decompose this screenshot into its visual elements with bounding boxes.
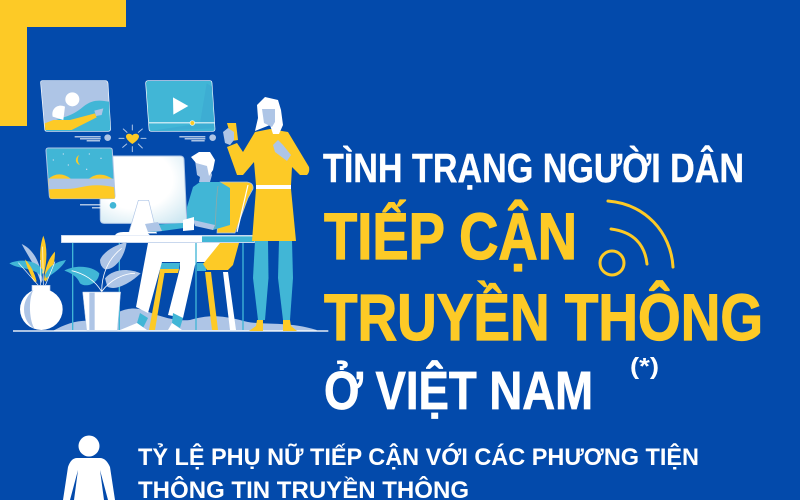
seated man [120,152,239,330]
section heading: TỶ LỆ PHỤ NỮ TIẾP CẬN VỚI CÁC PHƯƠNG TIỆN [138,442,699,471]
title line 2: TIẾP CẬN [324,199,577,273]
belt [256,185,291,189]
illustration: people at a desk with media [9,81,328,332]
video card with play button [146,81,215,131]
chair [149,182,253,330]
image card: person and landscape [41,81,111,131]
media cards and monitor [41,81,216,233]
corner bracket [0,0,126,126]
arms and hands [147,223,184,232]
sweater [227,129,309,185]
ground hills and line [13,308,328,332]
skirt [252,189,296,241]
hair [255,97,283,134]
trousers [136,243,222,318]
torso [187,182,230,230]
phone and hands [227,123,238,141]
plant in round vase [9,236,66,330]
night landscape card [46,148,115,199]
socks and shoes [137,313,183,328]
monitor [80,156,187,233]
section heading [138,442,699,500]
head [195,160,212,182]
plants [9,236,141,330]
face [262,109,275,127]
legs [253,241,268,320]
desk [61,232,255,330]
chair seat shell [203,243,239,270]
coffee cup [183,217,194,231]
motion lines and dots [75,134,216,141]
title line 4: Ở VIỆT NAM [324,360,593,421]
icon: heart with rays [119,125,146,152]
plant in pot [64,242,141,330]
icon: broadcast signal [600,201,673,275]
icon: woman figure [63,436,115,500]
footnote marker: (*) [630,353,659,379]
standing woman [223,97,309,331]
shoes [249,320,263,331]
